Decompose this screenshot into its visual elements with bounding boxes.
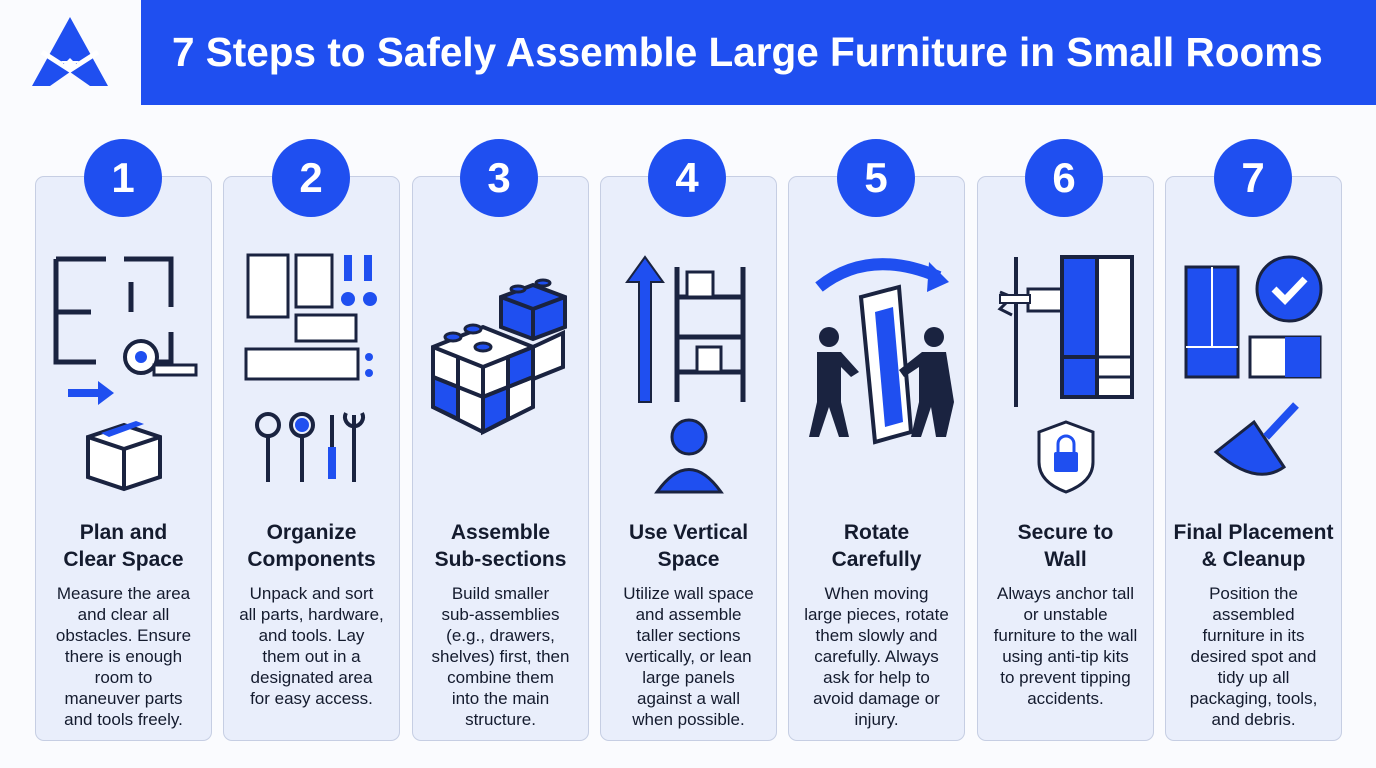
- heading: [832, 521, 922, 571]
- heading: Wall: [1044, 548, 1087, 571]
- text: Build smaller: [452, 584, 549, 603]
- panel: step 2: [223, 176, 400, 741]
- text: desired spot and: [1191, 647, 1316, 666]
- text: Utilize wall space: [623, 584, 754, 603]
- heading: Secure to: [1018, 521, 1113, 544]
- heading: Carefully: [832, 548, 921, 571]
- text: [56, 584, 191, 729]
- text: designated area: [251, 668, 372, 687]
- heading: [1174, 521, 1334, 571]
- panel: step 4: [600, 176, 777, 741]
- text: there is enough: [65, 647, 182, 666]
- text: furniture in its: [1202, 626, 1305, 645]
- logo: [32, 17, 108, 86]
- icon: components: [244, 254, 377, 482]
- badge 7: 7: [1241, 154, 1265, 201]
- text: using anti-tip kits: [1002, 647, 1129, 666]
- badge 1: 1: [111, 154, 135, 201]
- text: and assemble: [636, 605, 741, 624]
- text: [239, 584, 384, 708]
- text: combine them: [447, 668, 554, 687]
- text: (e.g., drawers,: [446, 626, 555, 645]
- badge 3: [460, 139, 538, 217]
- heading: [435, 521, 566, 571]
- badge 3: 3: [487, 154, 511, 201]
- text: injury.: [854, 710, 899, 729]
- text: packaging, tools,: [1190, 689, 1317, 708]
- text: and clear all: [78, 605, 169, 624]
- text: [804, 584, 949, 729]
- heading: & Cleanup: [1202, 548, 1305, 571]
- text: Measure the area: [57, 584, 190, 603]
- icon: placed furniture & cleanup: [1184, 256, 1322, 476]
- text: accidents.: [1027, 689, 1104, 708]
- heading: [629, 521, 748, 571]
- text: maneuver parts: [64, 689, 183, 708]
- heading: Use Vertical: [629, 521, 748, 544]
- title: [141, 0, 1376, 105]
- text: Unpack and sort: [250, 584, 373, 603]
- text: for easy access.: [250, 689, 373, 708]
- text: ask for help to: [823, 668, 930, 687]
- text: tidy up all: [1218, 668, 1289, 687]
- badge 5: 5: [864, 154, 888, 201]
- text: large pieces, rotate: [804, 605, 949, 624]
- text: structure.: [465, 710, 536, 729]
- panel: step 1: [35, 176, 212, 741]
- panel: step 6: [977, 176, 1154, 741]
- heading: Assemble: [451, 521, 550, 544]
- heading: [1018, 521, 1113, 571]
- text: them out in a: [262, 647, 361, 666]
- badge 4: 4: [675, 154, 699, 201]
- icon: rotate with helpers: [809, 258, 954, 445]
- text: [1190, 584, 1317, 729]
- heading: Plan and: [80, 521, 167, 544]
- text: taller sections: [637, 626, 740, 645]
- text: against a wall: [637, 689, 740, 708]
- icon: floor plan: [54, 256, 198, 492]
- heading: Final Placement: [1174, 521, 1333, 544]
- text: When moving: [825, 584, 928, 603]
- badge 6: [1025, 139, 1103, 217]
- badge 7: [1214, 139, 1292, 217]
- badge 4: [648, 139, 726, 217]
- text: [432, 584, 569, 729]
- text: and tools. Lay: [259, 626, 364, 645]
- text: or unstable: [1023, 605, 1108, 624]
- heading: [247, 521, 376, 571]
- text: them slowly and: [816, 626, 937, 645]
- text: Position the: [1209, 584, 1298, 603]
- badge 5: [837, 139, 915, 217]
- text: avoid damage or: [813, 689, 940, 708]
- text: shelves) first, then: [432, 647, 569, 666]
- text: all parts, hardware,: [239, 605, 384, 624]
- panel: step 7: [1165, 176, 1342, 741]
- heading: Rotate: [844, 521, 909, 544]
- heading: Clear Space: [63, 548, 184, 571]
- text: and debris.: [1211, 710, 1296, 729]
- heading: Components: [247, 548, 376, 571]
- text: sub-assemblies: [441, 605, 560, 624]
- icon: anchored wardrobe: [998, 255, 1134, 494]
- icon: blocks: [431, 278, 567, 436]
- text: to prevent tipping: [1000, 668, 1131, 687]
- text: [623, 584, 754, 729]
- text: large panels: [642, 668, 735, 687]
- heading: [63, 521, 184, 571]
- heading: Organize: [267, 521, 356, 544]
- panel: step 5: [788, 176, 965, 741]
- text: when possible.: [632, 710, 745, 729]
- text: obstacles. Ensure: [56, 626, 191, 645]
- text: [994, 584, 1137, 708]
- text: room to: [95, 668, 152, 687]
- heading: Sub-sections: [435, 548, 566, 571]
- badge 2: 2: [299, 154, 323, 201]
- text: into the main: [452, 689, 549, 708]
- icon: shelf & arrow: [625, 255, 746, 494]
- text: and tools freely.: [64, 710, 183, 729]
- badge 6: 6: [1052, 154, 1076, 201]
- badge 1: [84, 139, 162, 217]
- heading: Space: [658, 548, 719, 571]
- text: Always anchor tall: [997, 584, 1134, 603]
- panel: step 3: [412, 176, 589, 741]
- badge 2: [272, 139, 350, 217]
- text: carefully. Always: [814, 647, 939, 666]
- text: vertically, or lean: [625, 647, 752, 666]
- title: 7 Steps to Safely Assemble Large Furniture in Small Rooms: [172, 29, 1323, 75]
- text: furniture to the wall: [994, 626, 1137, 645]
- text: assembled: [1212, 605, 1295, 624]
